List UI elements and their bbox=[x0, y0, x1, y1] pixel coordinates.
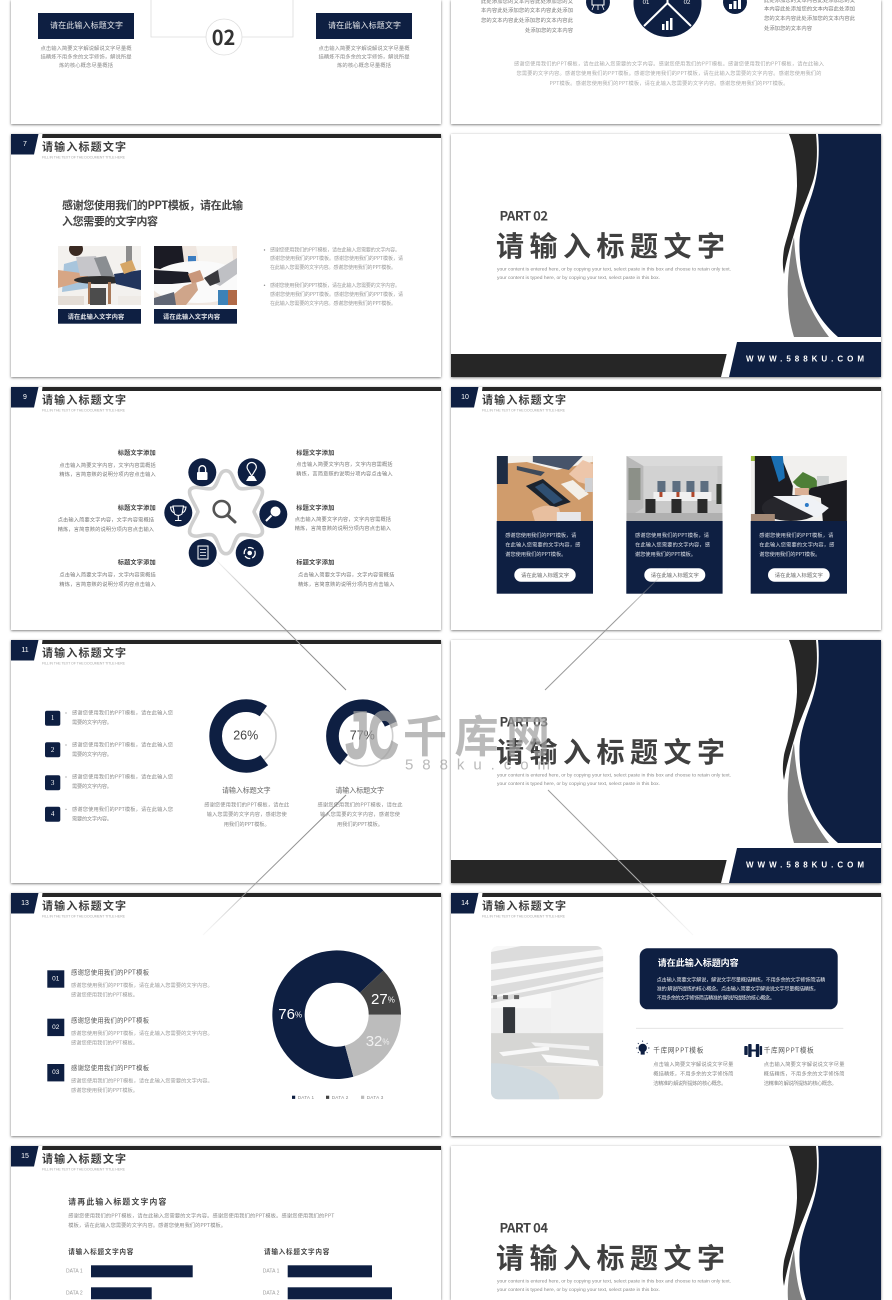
right column text: 标题文字添加 bbox=[296, 448, 334, 457]
right column text bbox=[295, 448, 394, 588]
header: 请输入标题文字 bbox=[482, 898, 566, 914]
button: 请在此输入标题文字 bbox=[775, 571, 823, 579]
card text: 在此输入您需要的文字内容，感 bbox=[635, 540, 710, 548]
left text: 处添加您的文本内容 bbox=[525, 26, 574, 34]
grey wave bbox=[788, 1249, 802, 1300]
item 02: 02 bbox=[52, 1024, 60, 1031]
item 02: 感谢您使用我们的PPT模板 bbox=[71, 1016, 150, 1024]
left bar chart: DATA 1 bbox=[66, 1268, 83, 1274]
list item 4: 感谢您使用我们的PPT模板，请在此输入您 bbox=[72, 805, 173, 813]
card text bbox=[635, 531, 710, 558]
watermark logo: JC bbox=[346, 698, 398, 772]
heading: 入您需要的文字内容 bbox=[62, 213, 158, 229]
navy wave bbox=[799, 1146, 881, 1300]
right text bbox=[318, 44, 410, 69]
list item 2: 需要的文字内容。 bbox=[72, 750, 112, 758]
item 01: 01 bbox=[52, 976, 60, 982]
grey wave bbox=[788, 743, 829, 843]
star outline bbox=[190, 471, 262, 554]
item 01 bbox=[47, 968, 213, 998]
legend: DATA 1 bbox=[298, 1095, 314, 1100]
feature 1: 点击输入简要文字解说说文字尽量 bbox=[653, 1060, 733, 1068]
left title box bbox=[38, 13, 134, 39]
bullet text: 感谢您使用我们的PPT模板，请在此输入您需要的文字内容。 bbox=[270, 246, 400, 254]
left column text: 精炼，言简意赅的说明分项内容点击输入 bbox=[58, 525, 154, 533]
bullet text: 感谢您使用我们的PPT模板。感谢您使用我们的PPT模板，请 bbox=[270, 255, 403, 262]
icon: lock bbox=[188, 458, 216, 486]
right column text: 点击输入简要文字内容，文字内容需概括 bbox=[295, 515, 391, 523]
heading: 请再此输入标题文字内容 bbox=[68, 1196, 167, 1208]
description: your content is typed here, or by copying your text, select paste in this box. bbox=[497, 1287, 660, 1293]
description: your content is entered here, or by copying your text, select paste in this box and choose to retain only text. bbox=[497, 1278, 731, 1284]
left text: 本内容此处添加您的文本内容此处添加 bbox=[481, 6, 573, 14]
heading bbox=[62, 197, 243, 229]
left column text: 标题文字添加 bbox=[118, 558, 156, 566]
left column text: 精炼，言简意赅的说明分项内容点击输入 bbox=[59, 580, 156, 588]
slide 7 bbox=[11, 134, 441, 377]
right title box bbox=[316, 13, 412, 39]
footer dark bar bbox=[451, 860, 727, 883]
donut 2 text bbox=[318, 800, 403, 828]
caption 1: 请在此输入文字内容 bbox=[68, 312, 124, 321]
left column text: 点击输入简要文字内容，文字内容需概括 bbox=[59, 461, 156, 469]
list item 3: 3 bbox=[51, 779, 55, 787]
description: your content is typed here, or by copying your text, select paste in this box. bbox=[497, 781, 660, 787]
header bbox=[451, 893, 881, 918]
header bbox=[11, 893, 441, 918]
paragraph bbox=[68, 1212, 334, 1229]
card text: 谢您使用我们的PPT模板。 bbox=[505, 550, 566, 558]
right text: 处添加您的文本内容 bbox=[764, 24, 813, 32]
pie diagram: 02 bbox=[684, 0, 691, 6]
feature 2: 洁精准的 解说所提炼的核心概念。 bbox=[764, 1079, 837, 1087]
item 03: 感谢您使用我们的PPT模板。 bbox=[71, 1086, 138, 1094]
part label: PART 03 bbox=[500, 712, 548, 730]
header: FILL IN THE TEXT OF THE DOCUMENT TITLE HERE bbox=[42, 408, 126, 412]
header: 请输入标题文字 bbox=[42, 139, 126, 155]
title callout: 请在此输入标题内容 bbox=[658, 956, 739, 969]
photo: white architecture bbox=[491, 946, 604, 1100]
donut 1 text: 输入您需要的文字内容，感谢您使 bbox=[207, 810, 287, 818]
donut 2 text: 用我们的PPT模板。 bbox=[337, 820, 383, 828]
header: 7 bbox=[23, 141, 27, 148]
badge 02 bbox=[206, 19, 242, 55]
divider bbox=[636, 1027, 843, 1029]
header: FILL IN THE TEXT OF THE DOCUMENT TITLE HERE bbox=[42, 914, 126, 918]
card text: 感谢您使用我们的PPT模板，请 bbox=[505, 531, 576, 539]
slide 15 bbox=[11, 1146, 441, 1300]
slide 13 bbox=[11, 893, 441, 1136]
header: 请输入标题文字 bbox=[42, 1151, 126, 1167]
pie diagram: 01 bbox=[643, 0, 650, 6]
dark wave bbox=[783, 640, 817, 780]
button: 请在此输入标题文字 bbox=[651, 571, 699, 579]
title callout bbox=[640, 948, 838, 1009]
icon: bars bbox=[723, 0, 747, 14]
photo: business meeting bbox=[154, 246, 237, 305]
right column text: 精炼，言简意赅的说明分项内容点击输入 bbox=[298, 580, 394, 588]
header: 13 bbox=[21, 900, 29, 907]
feature 1: 概括精炼，不用多余的文字修饰简 bbox=[653, 1070, 733, 1078]
list item 1: 需要的文字内容。 bbox=[72, 718, 112, 726]
item 03: 感谢您使用我们的PPT模板 bbox=[71, 1063, 150, 1072]
right title box: 请在此输入标题文字 bbox=[328, 20, 401, 31]
donut 1 text: 感谢您使用我们的PPT模板，请在此 bbox=[204, 800, 290, 808]
right column text: 标题文字添加 bbox=[296, 558, 334, 566]
header bbox=[451, 387, 881, 412]
right bar chart bbox=[263, 1246, 392, 1299]
donut 1 text: 用我们的PPT模板。 bbox=[224, 820, 270, 828]
slide: PART 04 section bbox=[451, 1146, 881, 1300]
header: FILL IN THE TEXT OF THE DOCUMENT TITLE HERE bbox=[482, 408, 566, 412]
watermark logo bbox=[346, 698, 550, 774]
watermark lines bbox=[203, 561, 693, 935]
section title: 请输入标题文字 bbox=[496, 731, 725, 771]
slide: PART 03 section bbox=[451, 640, 881, 883]
left text: 括精炼不用多余的文字修饰，解说所提 bbox=[40, 52, 132, 60]
right column text: 标题文字添加 bbox=[296, 503, 334, 512]
right column text: 精炼，言简意赅的说明分项内容点击输入 bbox=[295, 524, 391, 532]
footer url: WWW.588KU.COM bbox=[746, 354, 864, 364]
left column text: 标题文字添加 bbox=[118, 503, 156, 512]
donut chart: 27% bbox=[371, 991, 395, 1008]
feature 1: 千库网PPT模板 bbox=[653, 1044, 704, 1054]
donut chart bbox=[272, 950, 401, 1079]
donut 2 text: 感谢您使用我们的PPT模板，请在此 bbox=[318, 800, 403, 808]
footer dark bar bbox=[451, 354, 727, 377]
left text bbox=[40, 44, 132, 69]
right text: 炼的核心概念尽量概括 bbox=[337, 61, 392, 69]
header: 14 bbox=[461, 900, 469, 907]
card text: 感谢您使用我们的PPT模板，请 bbox=[635, 531, 709, 539]
legend: DATA 3 bbox=[367, 1095, 384, 1100]
header bbox=[11, 1146, 441, 1171]
header bbox=[11, 134, 441, 159]
icon: document bbox=[189, 539, 217, 567]
button: 请在此输入标题文字 bbox=[521, 571, 569, 579]
card text: 谢您使用我们的PPT模板。 bbox=[635, 550, 696, 558]
item 02 bbox=[47, 1016, 213, 1046]
list item 2: 2 bbox=[51, 746, 55, 754]
card 3 bbox=[751, 456, 847, 594]
right bar chart: DATA 1 bbox=[263, 1268, 280, 1274]
left title box: 请在此输入标题文字 bbox=[50, 20, 123, 31]
list item 4: 需要的文字内容。 bbox=[72, 814, 112, 822]
list item 2 bbox=[45, 740, 173, 758]
navy wave bbox=[799, 640, 881, 843]
navy wave bbox=[799, 134, 881, 337]
paragraph: 模板，请在此输入您需要的文字内容。感谢您使用我们的PPT模板。 bbox=[68, 1221, 226, 1229]
description bbox=[497, 266, 731, 281]
header: FILL IN THE TEXT OF THE DOCUMENT TITLE HERE bbox=[42, 155, 126, 159]
left text: 炼的核心概念尽量概括 bbox=[59, 61, 114, 69]
donut 2 title: 请输入标题文字 bbox=[335, 786, 384, 796]
watermark logo: 588ku.com bbox=[405, 756, 550, 774]
bullet text: 在此输入您需要的文字内容。感谢您使用我们的PPT模板。 bbox=[270, 264, 396, 271]
icon: trophy bbox=[164, 499, 192, 527]
list item 1 bbox=[45, 708, 173, 726]
watermark logo: 千库网 bbox=[403, 701, 550, 765]
header: 请输入标题文字 bbox=[42, 645, 126, 661]
card 2 bbox=[626, 456, 723, 594]
right text bbox=[764, 0, 856, 32]
photo: calculator on desk bbox=[496, 456, 593, 521]
description: your content is entered here, or by copying your text, select paste in this box and choose to retain only text. bbox=[497, 266, 731, 272]
donut 2 text: 输入您需要的文字内容，感谢您使 bbox=[320, 810, 401, 818]
description: your content is typed here, or by copying your text, select paste in this box. bbox=[497, 275, 660, 281]
photo: office room bbox=[626, 456, 722, 521]
photo: team at table bbox=[58, 246, 141, 305]
bullet text: 感谢您使用我们的PPT模板，请在此输入您需要的文字内容。 bbox=[270, 282, 400, 289]
title callout: 准的 解说所提炼的核心概念。点击输入简要文字解说说文字尽量概括精炼， bbox=[657, 986, 819, 992]
icon: key magnifier bbox=[259, 500, 287, 528]
right text: 本内容此处添加您的文本内容此处添加 bbox=[764, 4, 855, 12]
donut 26% bbox=[216, 706, 276, 766]
icon: target bbox=[236, 539, 264, 567]
left text: 您的文本内容此处添加您的文本内容此 bbox=[481, 16, 574, 24]
header bbox=[11, 387, 441, 412]
donut 77% bbox=[332, 706, 393, 766]
list item 3: 感谢您使用我们的PPT模板，请在此输入您 bbox=[72, 772, 173, 780]
right bar chart: 请输入标题文字内容 bbox=[264, 1246, 330, 1256]
list item 4 bbox=[45, 805, 173, 822]
donut 1 text bbox=[204, 800, 290, 828]
feature 2: 千库网PPT模板 bbox=[764, 1044, 814, 1054]
left column text: 标题文字添加 bbox=[118, 448, 156, 457]
icon: central magnifier bbox=[214, 501, 235, 522]
icon: pin bbox=[238, 458, 266, 486]
list item 1: 1 bbox=[51, 714, 55, 722]
item 01: 感谢您使用我们的PPT模板。 bbox=[71, 990, 138, 998]
slide: top-right pie bbox=[451, 0, 881, 124]
header: 请输入标题文字 bbox=[42, 898, 126, 914]
slide: PART 02 section bbox=[451, 134, 881, 377]
header: FILL IN THE TEXT OF THE DOCUMENT TITLE HERE bbox=[42, 661, 126, 665]
pie diagram bbox=[634, 0, 702, 37]
header: 15 bbox=[21, 1153, 29, 1160]
card text: 感谢您使用我们的PPT模板，请 bbox=[759, 531, 833, 539]
grey wave bbox=[788, 237, 829, 337]
photo: handshake bbox=[750, 456, 847, 521]
footer url bbox=[729, 848, 881, 883]
feature 2: 点击输入简要文字解说说文字尽量 bbox=[764, 1060, 844, 1068]
description bbox=[497, 772, 731, 787]
header: FILL IN THE TEXT OF THE DOCUMENT TITLE HERE bbox=[42, 1167, 126, 1171]
feature 1: 洁精准的 解说所提炼的核心概念。 bbox=[653, 1079, 726, 1087]
item 02: 感谢您使用我们的PPT模板，请在此输入您需要的文字内容。 bbox=[71, 1029, 213, 1037]
description bbox=[497, 1278, 731, 1293]
paragraph: 感谢您使用我们的PPT模板，请在此输入您需要的文字内容。感谢您使用我们的PPT模板。感谢您使用我们的PPT模板，请在此输入 bbox=[514, 60, 824, 68]
left bar chart: DATA 2 bbox=[66, 1290, 83, 1296]
item 03: 03 bbox=[52, 1069, 60, 1076]
slide 10 bbox=[451, 387, 881, 630]
outline frame bbox=[151, 0, 293, 37]
header: 11 bbox=[21, 647, 29, 654]
left bar chart bbox=[66, 1246, 193, 1299]
right bar chart: DATA 2 bbox=[263, 1290, 280, 1296]
footer url bbox=[729, 342, 881, 377]
legend bbox=[292, 1095, 384, 1100]
donut 77%: 77% bbox=[350, 728, 375, 742]
header: 请输入标题文字 bbox=[482, 392, 566, 408]
header: 请输入标题文字 bbox=[42, 392, 126, 408]
list item 3 bbox=[45, 772, 173, 790]
title callout: 点击输入简要文字解说，解说文字尽量概括精炼，不用多余的文字修饰简洁精 bbox=[657, 976, 825, 984]
right column text: 点击输入简要文字内容，文字内容需概括 bbox=[296, 460, 393, 468]
list item 1: 感谢您使用我们的PPT模板，请在此输入您 bbox=[72, 708, 173, 716]
item 01: 感谢您使用我们的PPT模板 bbox=[71, 968, 150, 976]
bullet text: 在此输入您需要的文字内容。感谢您使用我们的PPT模板。 bbox=[270, 300, 396, 307]
bullet text: 感谢您使用我们的PPT模板。感谢您使用我们的PPT模板，请 bbox=[270, 291, 403, 298]
slide 11 bbox=[11, 640, 441, 883]
slide: top-left feature boxes bbox=[11, 0, 441, 124]
right text: 点击输入简要文字解说解说文字尽量概 bbox=[318, 44, 410, 52]
feature 2 bbox=[764, 1044, 844, 1087]
left bar chart: 请输入标题文字内容 bbox=[68, 1246, 134, 1256]
header: 10 bbox=[461, 394, 469, 401]
section title: 请输入标题文字 bbox=[496, 225, 725, 265]
part label: PART 02 bbox=[500, 206, 548, 224]
caption 2: 请在此输入文字内容 bbox=[163, 312, 220, 321]
caption 1 bbox=[58, 309, 141, 324]
donut chart: 76% bbox=[278, 1006, 302, 1023]
header: 9 bbox=[23, 394, 27, 401]
slide 9 bbox=[11, 387, 441, 630]
item 03: 感谢您使用我们的PPT模板，请在此输入您需要的文字内容。 bbox=[71, 1076, 213, 1084]
caption 2 bbox=[154, 309, 237, 324]
item 02: 感谢您使用我们的PPT模板。 bbox=[71, 1038, 138, 1046]
right column text: 点击输入简要文字内容，文字内容需概括 bbox=[298, 570, 394, 578]
part label: PART 04 bbox=[500, 1218, 548, 1236]
donut 1 title: 请输入标题文字 bbox=[222, 786, 271, 796]
feature 1 bbox=[653, 1044, 733, 1087]
title callout: 不用多余的文字修饰简洁精准的 解说所提炼的核心概念。 bbox=[657, 994, 775, 1002]
footer url: WWW.588KU.COM bbox=[746, 860, 864, 870]
icon: dumbbell bbox=[744, 1044, 762, 1057]
card text: 在此输入您需要的文字内容，感 bbox=[505, 540, 580, 548]
heading: 感谢您使用我们的PPT模板，请在此输 bbox=[62, 197, 243, 213]
card text bbox=[759, 531, 834, 558]
paragraph: 您需要的文字内容。感谢您使用我们的PPT模板。感谢您使用我们的PPT模板，请在此输入您需要的文字内容。感谢您使用我们的 bbox=[516, 69, 822, 77]
paragraph: 感谢您使用我们的PPT模板，请在此输入您需要的文字内容。感谢您使用我们的PPT模板。感谢您使用我们的PPT bbox=[68, 1212, 334, 1220]
card text: 谢您使用我们的PPT模板。 bbox=[759, 550, 820, 558]
donut chart: 32% bbox=[366, 1033, 390, 1050]
left column text: 精炼，言简意赅的说明分项内容点击输入 bbox=[59, 470, 156, 478]
section title: 请输入标题文字 bbox=[496, 1237, 725, 1277]
right text: 您的文本内容此处添加您的文本内容此 bbox=[764, 14, 856, 22]
left text: 点击输入简要文字解说解说文字尽量概 bbox=[40, 44, 132, 52]
card 1 bbox=[497, 456, 593, 594]
header: FILL IN THE TEXT OF THE DOCUMENT TITLE HERE bbox=[482, 914, 566, 918]
slide 14 bbox=[423, 893, 881, 1136]
header bbox=[11, 640, 441, 665]
badge 02: 02 bbox=[212, 22, 235, 51]
paragraph: PPT模板。感谢您使用我们的PPT模板，请在此输入您需要的文字内容。感谢您使用我们的PPT模板。 bbox=[550, 79, 788, 87]
list item 3: 需要的文字内容。 bbox=[72, 782, 112, 790]
feature 2: 概括精炼，不用多余的文字修饰简 bbox=[764, 1070, 844, 1078]
dark wave bbox=[783, 134, 817, 274]
icon: presentation board bbox=[586, 0, 610, 14]
list item 4: 4 bbox=[51, 810, 55, 818]
item 01: 感谢您使用我们的PPT模板，请在此输入您需要的文字内容。 bbox=[71, 981, 213, 989]
list item 2: 感谢您使用我们的PPT模板，请在此输入您 bbox=[72, 740, 173, 748]
item 03 bbox=[47, 1063, 213, 1094]
right text: 括精炼不用多余的文字修饰，解说所提 bbox=[318, 52, 410, 60]
legend: DATA 2 bbox=[332, 1095, 349, 1100]
left text bbox=[481, 0, 574, 34]
card text: 在此输入您需要的文字内容，感 bbox=[759, 540, 834, 548]
card text bbox=[505, 531, 580, 558]
left column text: 点击输入简要文字内容，文字内容需概括 bbox=[58, 516, 154, 524]
dark wave bbox=[783, 1146, 817, 1286]
donut 26%: 26% bbox=[233, 728, 258, 742]
icon: bulb bbox=[636, 1040, 650, 1055]
right column text: 精炼，言简意赅的说明分项内容点击输入 bbox=[296, 470, 393, 478]
bullet text bbox=[264, 246, 403, 307]
left column text bbox=[58, 448, 156, 588]
description: your content is entered here, or by copying your text, select paste in this box and choose to retain only text. bbox=[497, 772, 731, 778]
paragraph bbox=[514, 60, 824, 87]
left column text: 点击输入简要文字内容，文字内容需概括 bbox=[59, 570, 156, 578]
